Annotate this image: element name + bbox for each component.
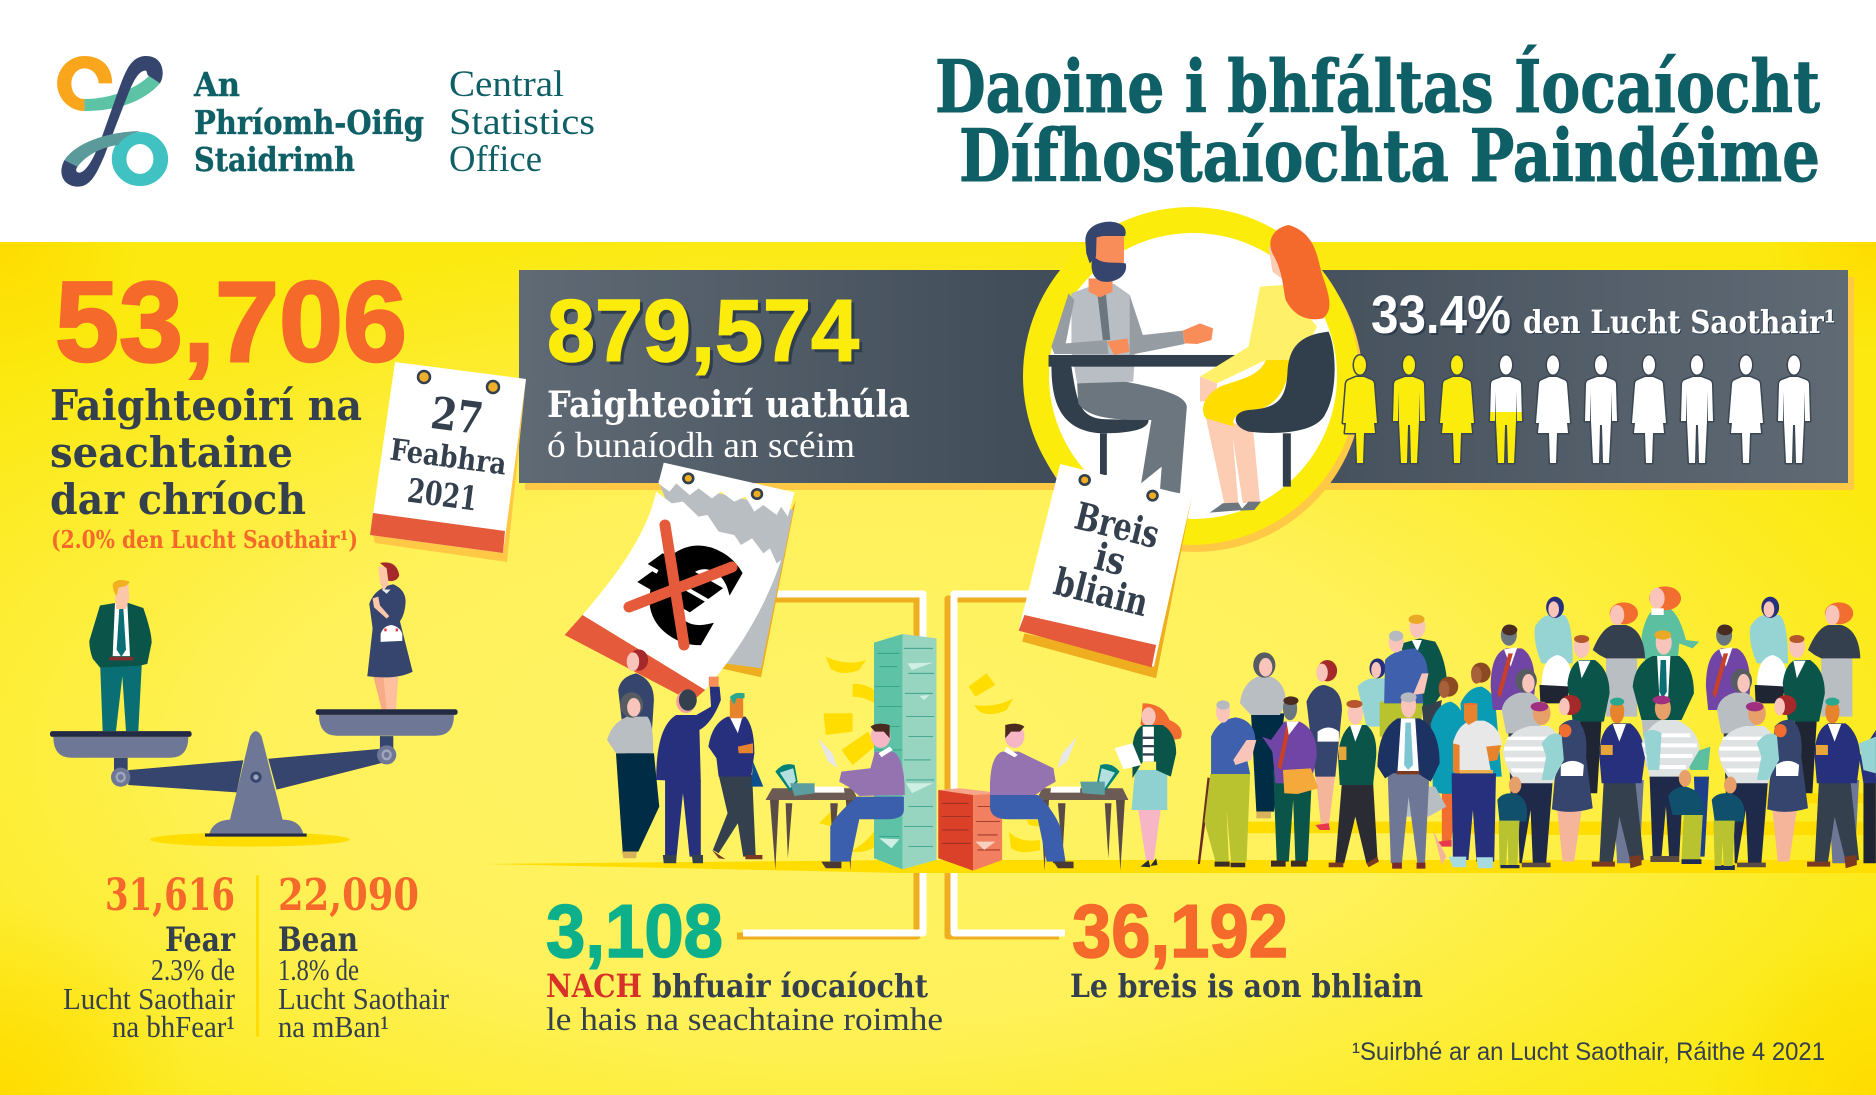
illustration: green paper stack — [874, 634, 936, 869]
woman with papers — [1115, 703, 1182, 867]
logo text: Irish name — [193, 65, 424, 179]
front-right boy — [1712, 777, 1744, 870]
illustration: calendar 27 February 2021 — [370, 362, 526, 562]
stat: 3,108 not paid: 3,108 — [546, 889, 723, 973]
stat: 31,616 men: Fear — [165, 920, 236, 960]
stat: 33.4% of labour force: den Lucht Saothair¹ — [1523, 303, 1836, 341]
stat: 879,574 unique recipients — [547, 281, 910, 465]
logo text: English name: Statistics — [449, 102, 595, 143]
logo text: Irish name: An — [193, 65, 240, 104]
stat: 36,192 more than one year — [1070, 889, 1423, 1005]
illustration: crowd of recipients — [1198, 586, 1876, 870]
illustration: calendar 27 February 2021: Feabhra — [388, 433, 509, 483]
stat: 53,706 last-week recipients: (2.0% den Lucht Saothair¹) — [51, 525, 358, 554]
right pan — [316, 709, 458, 736]
calendar text: Breis is bliain: bliain — [1050, 559, 1153, 625]
title — [935, 44, 1820, 198]
stat: 3,108 not paid: bhfuair íocaíocht — [652, 967, 928, 1005]
stat: 53,706 last-week recipients: 53,706 — [55, 259, 407, 386]
stat: 33.4% of labour force: 33.4% — [1373, 287, 1513, 347]
stat: 22,090 women: na mBan¹ — [278, 1009, 389, 1044]
stat: 879,574 unique recipients: ó bunaíodh an scéim — [547, 425, 855, 465]
illustration: calendar reading more than a year — [1019, 464, 1192, 678]
stat: 31,616 men: na bhFear¹ — [112, 1009, 235, 1044]
man holding a drink — [708, 693, 763, 859]
stat: 879,574 unique recipients: 879,574 — [550, 284, 862, 383]
icon: euro symbol crossed out: € — [612, 508, 761, 677]
man with raised arm — [656, 677, 721, 863]
panel: dark stat band — [519, 270, 1854, 490]
stat: 31,616 men: 2.3% de — [151, 952, 235, 987]
stat: 36,192 more than one year: Le breis is aon bhliain — [1070, 967, 1423, 1005]
logo text: English name: Central — [449, 64, 564, 105]
illustration: interview in yellow ring — [1023, 207, 1363, 552]
stat: 22,090 women: 1.8% de — [278, 952, 359, 987]
centre tall man — [1633, 630, 1710, 857]
front-right striped man with child — [1642, 696, 1704, 864]
stat: 31,616 men: 31,616 — [105, 870, 235, 921]
illustration: torn calendar with crossed out euro — [565, 463, 796, 702]
illustration: paper scraps — [819, 657, 1040, 852]
logo text: Irish name: Phríomh-Oifig — [194, 103, 424, 142]
stat: 31,616 men: Lucht Saothair — [63, 981, 236, 1016]
illustration: calendar 27 February 2021: 27 — [428, 388, 486, 445]
stat: 33.4% of labour force: 33.4% — [1371, 285, 1511, 345]
woman in grey top — [607, 692, 659, 858]
stat: 36,192 more than one year: 36,192 — [1072, 889, 1288, 973]
stat: 3,108 not paid — [546, 889, 943, 1038]
calendar text: Breis is bliain — [1050, 493, 1164, 625]
stat: 3,108 not paid: NACH — [546, 967, 642, 1005]
far right figure — [1859, 730, 1876, 863]
repeated rear and front figures — [1491, 597, 1645, 868]
illustration: red paper stack — [938, 788, 1002, 871]
calendar text: Breis is bliain: Breis — [1071, 493, 1164, 557]
woman on scale — [367, 562, 413, 709]
logo text: English name — [449, 64, 595, 180]
left worker at desk — [766, 724, 905, 871]
calendar text: Breis is bliain: is — [1090, 533, 1130, 584]
stat: 879,574 unique recipients: 879,574 — [547, 281, 859, 380]
stat: 53,706 last-week recipients: dar chríoch — [50, 475, 306, 524]
stat: 53,706 last-week recipients — [50, 259, 407, 554]
woman standing behind — [618, 649, 654, 770]
pictogram: ten people, 3.34 filled — [1343, 356, 1810, 463]
connector lines — [737, 594, 1065, 936]
stat: 53,706 last-week recipients: seachtaine — [50, 428, 293, 477]
front-row figures, left — [1198, 700, 1256, 867]
man on scale — [89, 580, 152, 731]
stat: 22,090 women — [278, 870, 450, 1044]
stat: 33.4% of labour force: den Lucht Saothair¹ — [1524, 304, 1837, 342]
stat: 3,108 not paid: le hais na seachtaine roimhe — [546, 1002, 943, 1038]
illustration: calendar 27 February 2021: 2021 — [405, 471, 480, 518]
rear figures, left cluster — [1240, 586, 1699, 865]
stat: 33.4% of labour force — [1371, 285, 1837, 347]
ground strip — [484, 860, 1876, 873]
logo text: Irish name: Staidrimh — [194, 140, 355, 179]
stat: 31,616 men — [63, 870, 236, 1044]
background: yellow panel — [0, 242, 1876, 1095]
stat: 22,090 women: Bean — [278, 920, 358, 960]
divider between men and women — [256, 875, 259, 1037]
stat: 22,090 women: Lucht Saothair — [278, 981, 450, 1016]
stat: 53,706 last-week recipients: Faighteoirí na — [50, 381, 362, 430]
icon: CSO logo mark — [57, 56, 163, 187]
footnote: ¹Suirbhé ar an Lucht Saothair, Ráithe 4 2021 — [1352, 1038, 1825, 1066]
right worker at desk — [990, 724, 1128, 871]
logo text: English name: Office — [449, 139, 542, 180]
stat: 879,574 unique recipients: Faighteoirí uathúla — [547, 384, 910, 426]
left pan — [50, 731, 192, 758]
stat: 22,090 women: 22,090 — [278, 870, 419, 921]
illustration: office workers and queue, left — [607, 649, 1182, 871]
illustration: balance scale with man and woman — [50, 562, 458, 847]
